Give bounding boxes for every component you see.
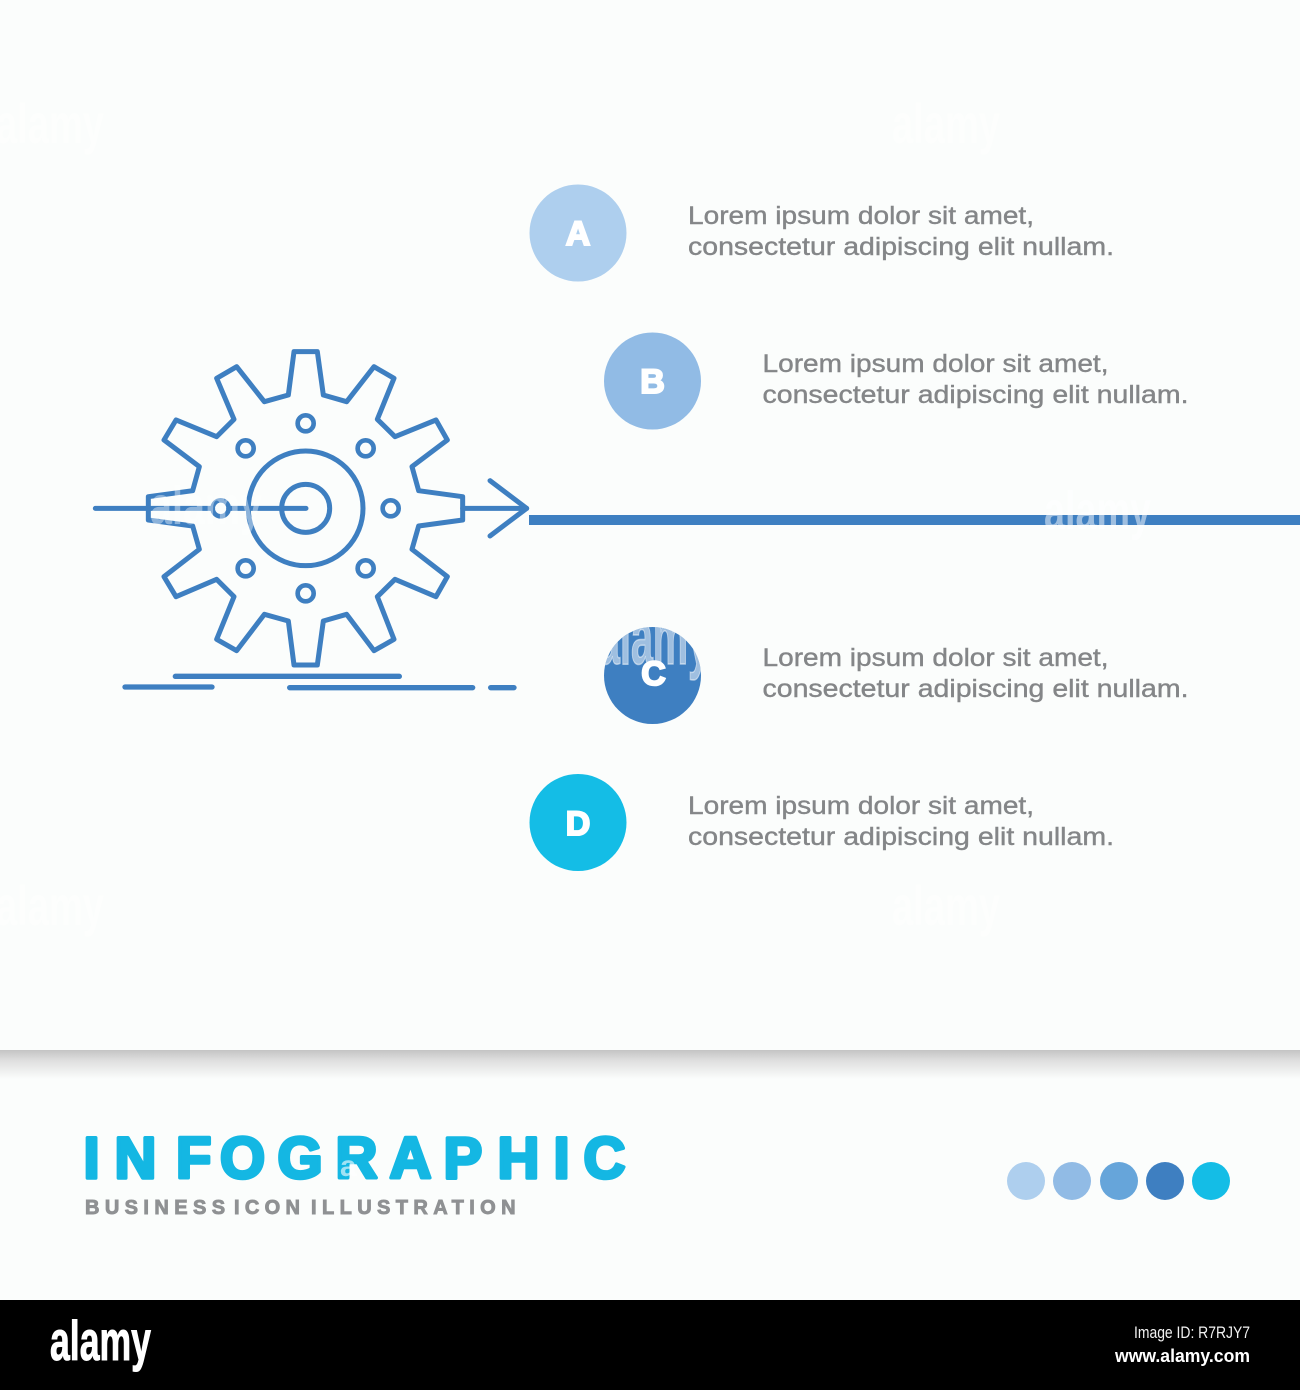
gear outline [148, 352, 463, 665]
item D [530, 774, 1114, 871]
website: www.alamy.com [1114, 1346, 1250, 1366]
arrow shaft and head [95, 481, 527, 536]
gear hub rings [248, 451, 363, 566]
text D: Lorem ipsum dolor sit amet, [688, 792, 1034, 820]
text: alamy [150, 476, 262, 536]
text C [762, 644, 1188, 703]
ground lines [125, 676, 514, 688]
badge C: C [641, 655, 666, 693]
text: a [340, 1150, 357, 1183]
text B: Lorem ipsum dolor sit amet, [762, 350, 1108, 378]
text: alamy [1044, 481, 1151, 541]
text: alamy [0, 92, 104, 155]
icon: gear with arrow [95, 352, 527, 688]
item B [604, 332, 1188, 430]
title: INFOGRAPHIC [84, 1126, 625, 1191]
text D [688, 792, 1114, 851]
badge A: A [566, 215, 590, 253]
badge B: B [640, 363, 665, 401]
text: alamy [892, 874, 1000, 937]
subtitle: ILLUSTRATION [311, 1197, 521, 1219]
palette dots [1007, 1162, 1230, 1200]
text A: Lorem ipsum dolor sit amet, [688, 202, 1034, 230]
panel shadow band [0, 1050, 1300, 1079]
item C [604, 627, 1186, 724]
badge B [604, 332, 701, 430]
badge C: alamy [598, 596, 710, 681]
footer bar [0, 1300, 1300, 1390]
badge A [530, 184, 626, 282]
text A: consectetur adipiscing elit nullam. [688, 233, 1114, 261]
text: alamy [0, 874, 104, 937]
subtitle: ICON [234, 1197, 305, 1219]
text D: consectetur adipiscing elit nullam. [688, 823, 1114, 851]
text C: Lorem ipsum dolor sit amet, [762, 644, 1108, 672]
timeline bar [529, 515, 1300, 525]
text: alamy [892, 92, 1000, 155]
subtitle: BUSINESS [85, 1197, 230, 1219]
badge D [530, 774, 626, 871]
item A [530, 184, 1114, 282]
text A [688, 202, 1114, 261]
badge D: D [566, 805, 590, 843]
text B [762, 350, 1188, 409]
text B: consectetur adipiscing elit nullam. [762, 381, 1188, 409]
image id: Image ID: R7RJY7 [1134, 1323, 1250, 1342]
gear bolt holes [213, 415, 399, 601]
badge C [604, 627, 701, 724]
text C: consectetur adipiscing elit nullam. [762, 675, 1188, 703]
footer logo: alamy [50, 1309, 151, 1372]
